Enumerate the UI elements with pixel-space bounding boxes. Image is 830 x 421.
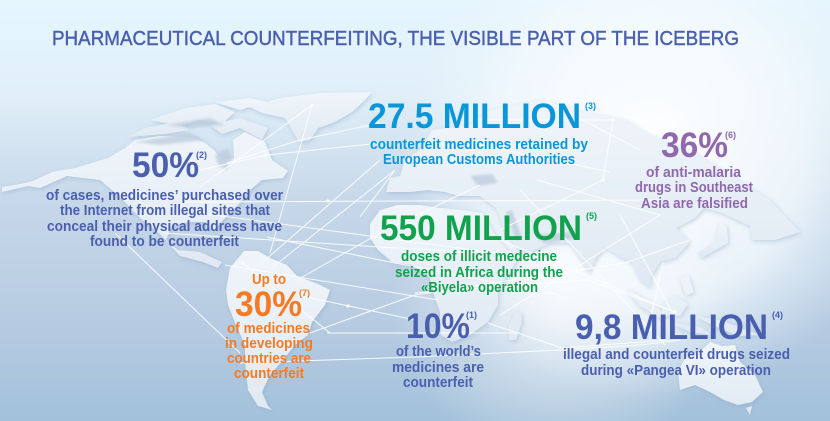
description: customs: European Customs Authorities (383, 152, 575, 168)
figure: 27.5 MILLION: 27.5 MILLION (368, 97, 581, 136)
description: developing countries: in developing (225, 336, 313, 352)
description: Biyela operation (395, 249, 563, 296)
description: developing countries (225, 321, 313, 382)
description: Biyela operation: «Biyela» operation (421, 280, 538, 296)
reference: (7): (7) (299, 288, 310, 298)
reference: (6): (6) (725, 130, 736, 140)
description: online medicines: found to be counterfeit (90, 234, 239, 250)
description: developing countries: counterfeit (234, 366, 304, 382)
callout: 27.5 million (368, 97, 596, 168)
map: Southeast Asia islands (625, 275, 760, 336)
map shading (135, 118, 574, 244)
description: world's medicines: medicines are (392, 360, 484, 376)
network nodes (241, 103, 677, 314)
connection network lines (115, 100, 690, 363)
description: online medicines: the Internet from illegal sites that (60, 203, 270, 219)
title: PHARMACEUTICAL COUNTERFEITING, THE VISIBLE PART OF THE ICEBERG (52, 27, 739, 50)
map: Greenland (250, 92, 372, 142)
description: world's medicines (392, 344, 484, 391)
description: online medicines (46, 188, 283, 250)
reference: (4): (4) (772, 310, 783, 320)
reference: (1): (1) (466, 310, 477, 320)
description: Pangea VI: during «Pangea VI» operation (581, 363, 771, 379)
callout: 36% anti-malaria (635, 126, 753, 212)
map: Canadian Arctic islands (127, 98, 268, 140)
reference: (5): (5) (586, 211, 597, 221)
description: anti-malaria drugs (635, 165, 753, 212)
reference: (3): (3) (585, 101, 596, 111)
figure: 9,8 MILLION: 9,8 MILLION (575, 308, 768, 347)
label: Up to: Up to (252, 272, 286, 288)
description: developing countries: countries are (227, 351, 311, 367)
description: anti-malaria drugs: Asia are falsified (641, 196, 748, 212)
figure: 36%: 36% (661, 126, 728, 165)
description: Biyela operation: doses of illicit medecine (401, 249, 557, 265)
description: customs (370, 137, 588, 168)
callout: 9,8 million (563, 308, 790, 379)
callout: 10% (392, 307, 484, 391)
description: developing countries: of medicines (227, 321, 310, 337)
description: anti-malaria drugs: drugs in Southeast (635, 180, 753, 196)
figure: 50%: 50% (132, 146, 199, 185)
callout: up to 30% (225, 272, 313, 382)
map: Australia and New Zealand (678, 342, 763, 415)
description: online medicines: conceal their physical address have (47, 219, 282, 235)
description: anti-malaria drugs: of anti-malaria (646, 165, 742, 181)
description: world's medicines: counterfeit (403, 375, 473, 391)
figure: 10%: 10% (406, 307, 470, 346)
callout: 550 million (380, 209, 597, 296)
description: customs: counterfeit medicines retained by (370, 137, 588, 153)
description: Biyela operation: seized in Africa during the (395, 265, 563, 281)
map: Europe and Asia (386, 100, 800, 288)
map: Africa and Madagascar (370, 205, 522, 342)
map: North America (2, 132, 288, 268)
map: Japan (698, 222, 728, 258)
reference: (2): (2) (196, 150, 207, 160)
figure: 30%: 30% (235, 285, 302, 324)
world map (2, 92, 800, 415)
description: Pangea VI (563, 347, 790, 379)
map: South America (226, 251, 330, 410)
description: world's medicines: of the world’s (396, 344, 481, 360)
description: Pangea VI: illegal and counterfeit drugs seized (563, 347, 790, 363)
callout: 50% purchased online (46, 146, 283, 250)
description: online medicines: of cases, medicines’ purchased over (46, 188, 283, 204)
figure: 550 MILLION: 550 MILLION (380, 209, 582, 248)
